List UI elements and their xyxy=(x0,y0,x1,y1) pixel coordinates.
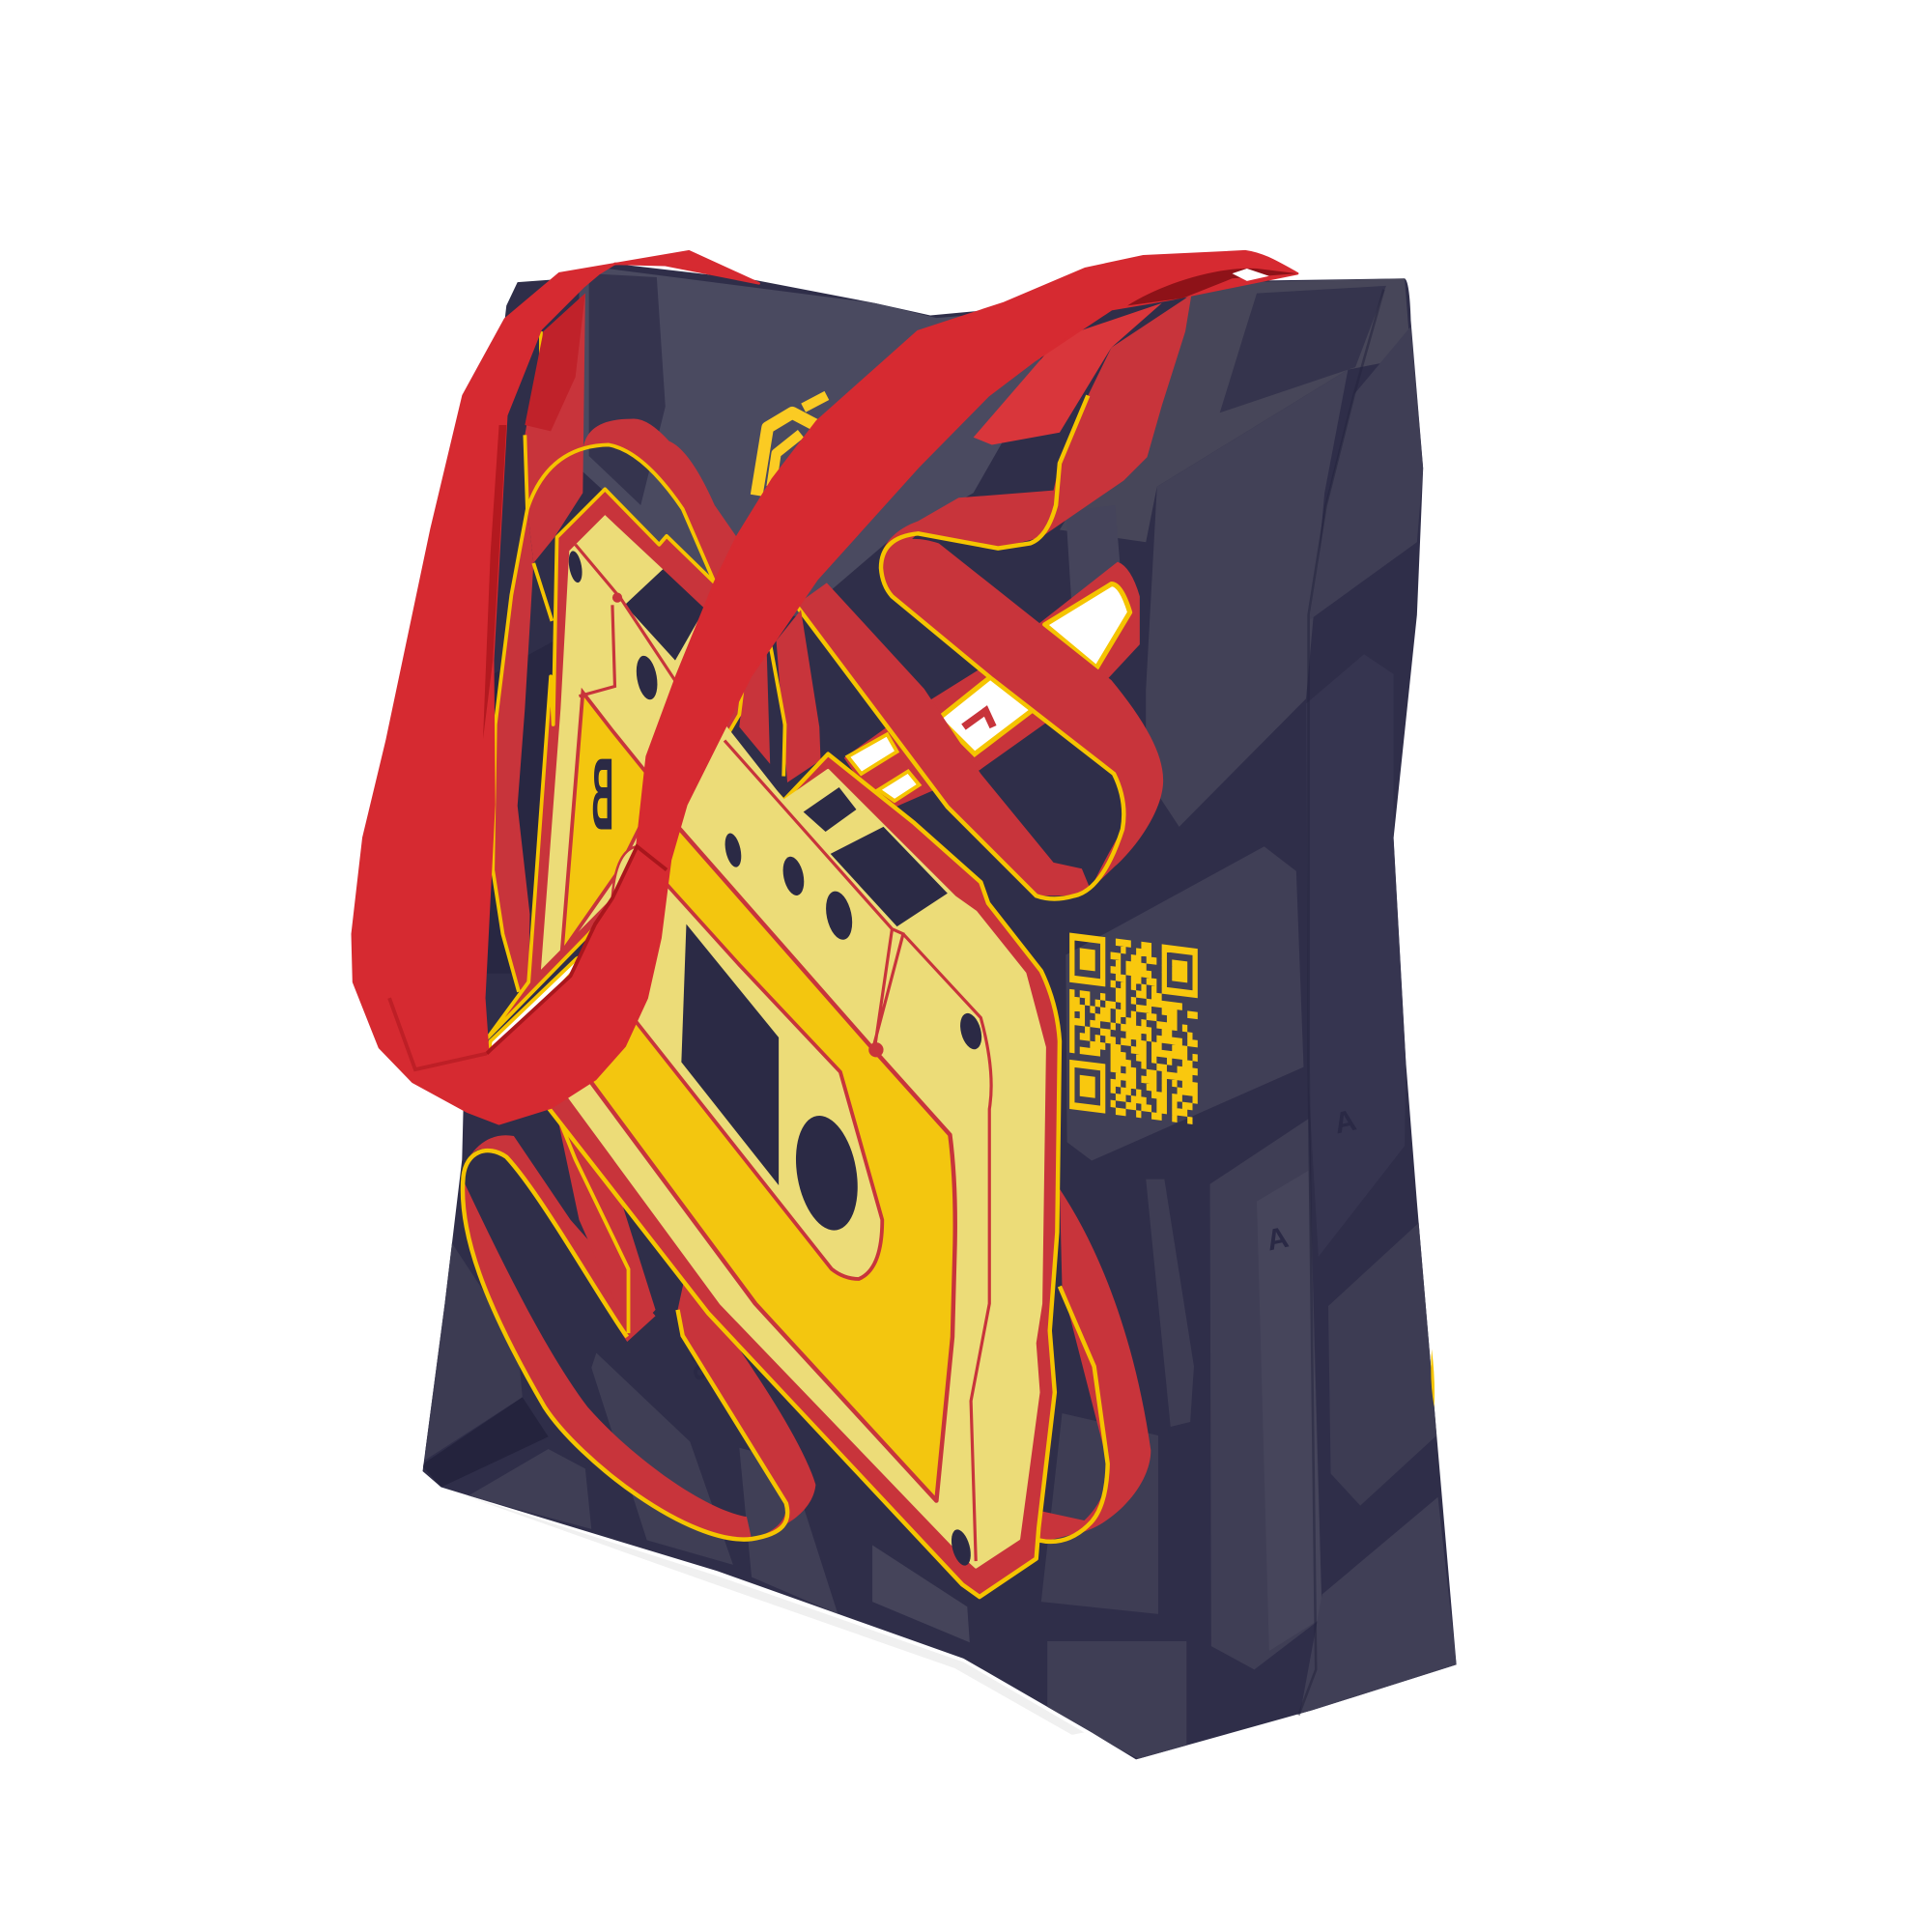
right side fold seam xyxy=(1298,290,1383,1716)
faint pattern letters xyxy=(683,1103,1359,1382)
cassette body xyxy=(567,721,1045,1567)
product illustration: cassette tote bag xyxy=(352,249,1457,1760)
faint pattern letters: 03 xyxy=(683,1345,722,1382)
small yellow sliver on side panel xyxy=(1431,1350,1435,1407)
cassette window xyxy=(681,924,779,1185)
faint pattern letters: A xyxy=(1264,1221,1292,1257)
ribbon: lower right loop xyxy=(1038,1189,1151,1543)
cassette side letter: B xyxy=(591,736,613,851)
white tape behind strap xyxy=(489,952,591,1051)
ribbon: lower left loop xyxy=(463,1108,815,1540)
strap loop tabs xyxy=(525,294,1162,444)
main cassette xyxy=(549,721,1060,1597)
cassette reel hole xyxy=(787,1111,866,1236)
ground shadow xyxy=(462,1494,1084,1735)
ribbon: left tape loop behind cassette xyxy=(493,294,739,992)
bag body xyxy=(423,264,1457,1759)
ribbon: upper right loop xyxy=(739,295,1191,898)
back cassette xyxy=(488,489,752,1051)
faint pattern letters: A xyxy=(1331,1103,1359,1140)
cassette contour lines xyxy=(724,741,991,1561)
top windows and holes xyxy=(723,787,985,1568)
white cassette fragment with tape xyxy=(844,562,1140,813)
QR code xyxy=(1069,936,1198,1122)
red strap xyxy=(353,251,1297,1123)
label cut-out xyxy=(622,868,882,1279)
cassette label xyxy=(589,813,955,1501)
yellow tag motif xyxy=(756,395,827,496)
background cassette pattern xyxy=(421,265,1457,1759)
